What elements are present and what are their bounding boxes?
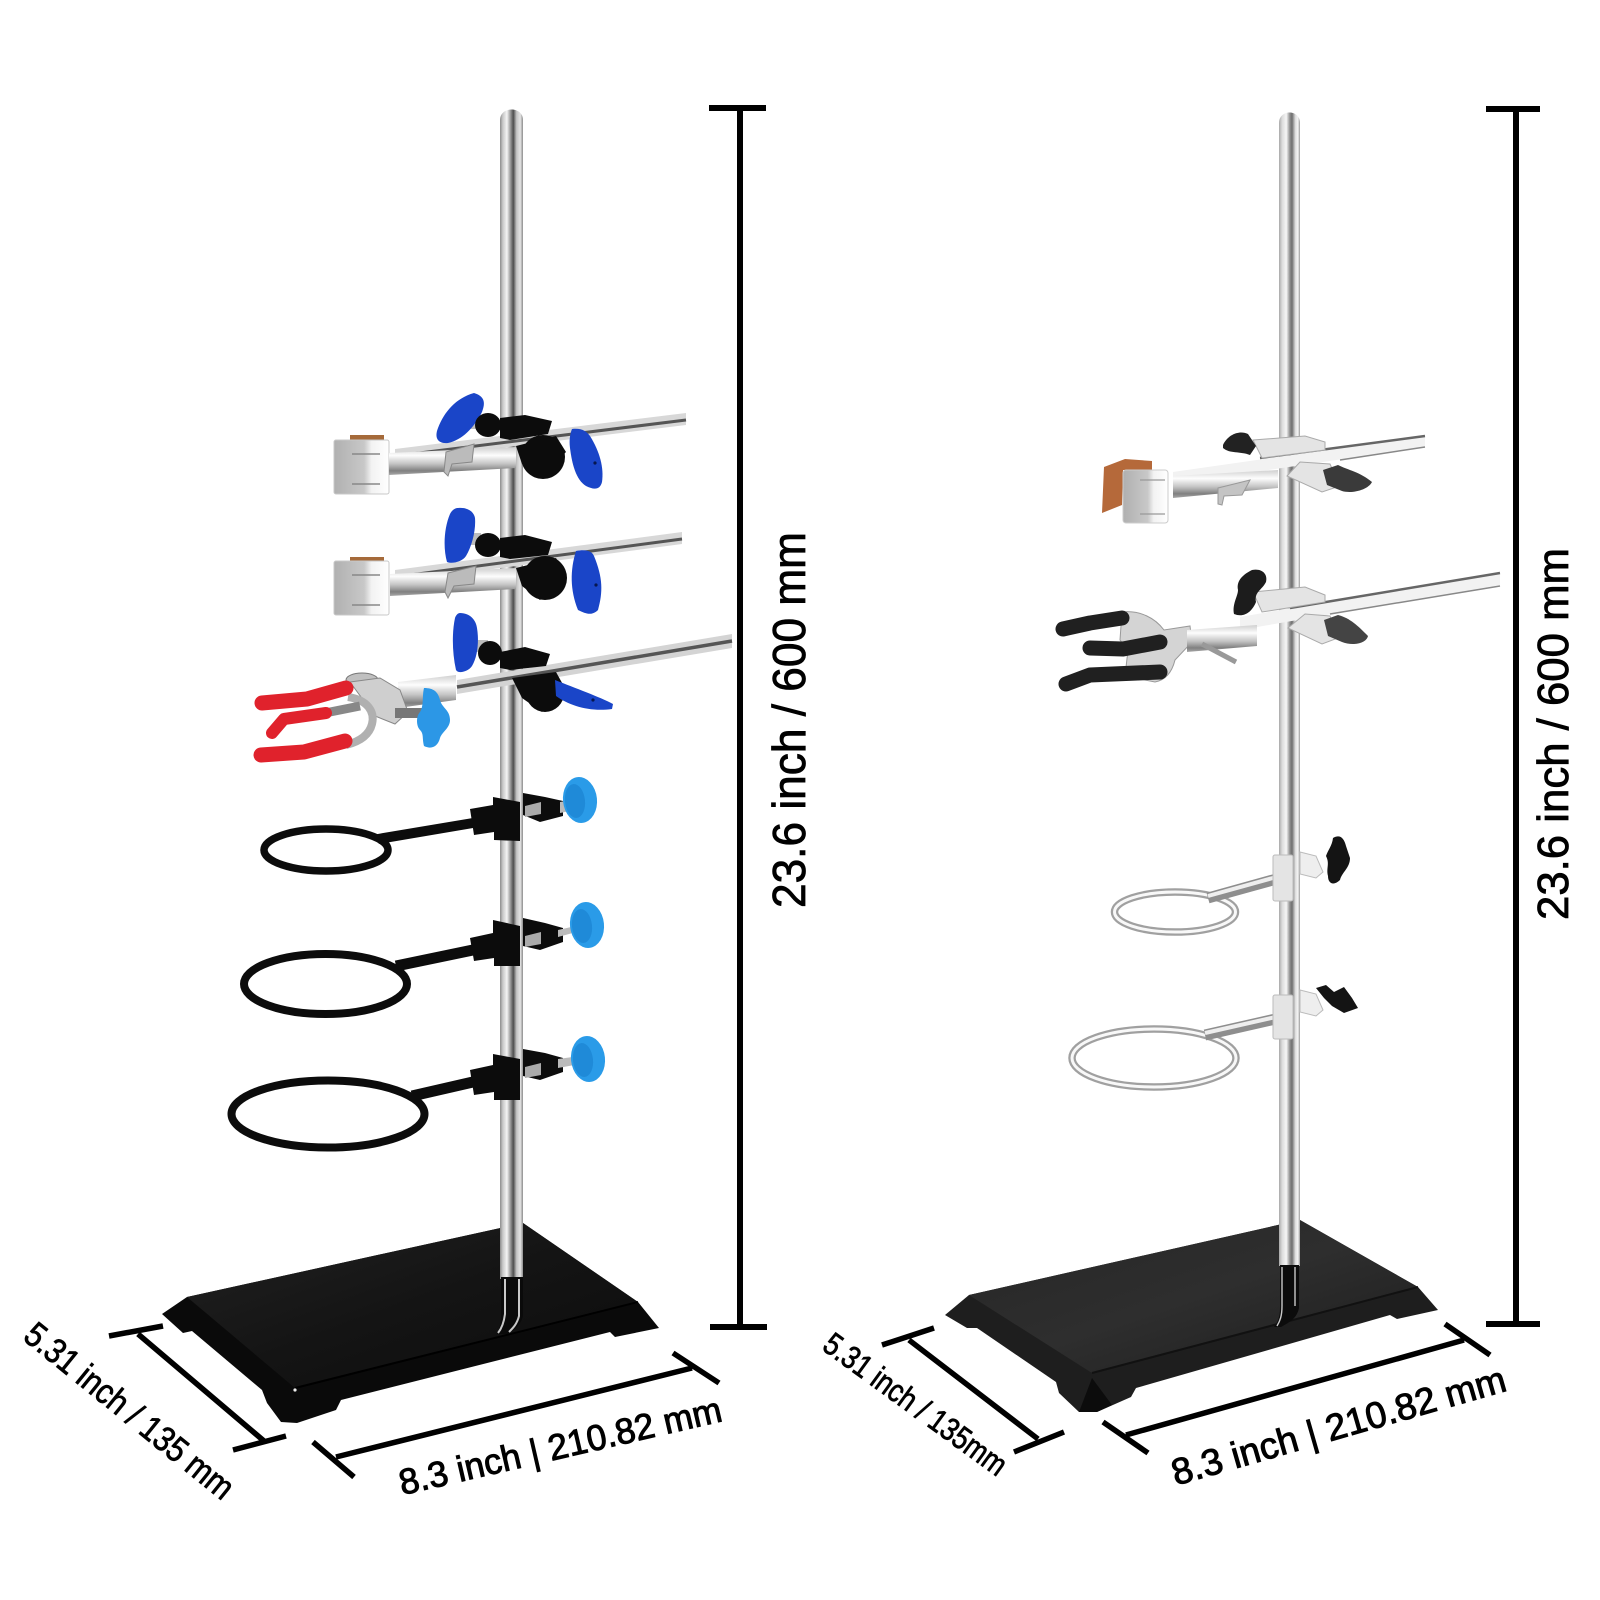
blue thumb wheel bbox=[569, 1034, 607, 1084]
clamp 1: left stand bbox=[334, 393, 686, 494]
lower bracket bbox=[1287, 462, 1340, 492]
clamp 2: left stand bbox=[334, 508, 682, 615]
upper black knob bbox=[1234, 570, 1266, 615]
clamp body bbox=[390, 568, 516, 596]
ring bbox=[264, 829, 388, 871]
wing nut bbox=[1218, 480, 1250, 505]
lower black knob bbox=[1323, 465, 1372, 492]
clamp 3: left stand with red jaws bbox=[261, 613, 732, 755]
ring support 1: left stand bbox=[264, 775, 599, 871]
lower bracket bbox=[1288, 614, 1338, 644]
long arm bbox=[395, 413, 686, 461]
silver ring bbox=[1072, 1029, 1236, 1087]
collar bbox=[1273, 995, 1293, 1039]
collar bbox=[470, 797, 520, 841]
long arm bbox=[395, 532, 682, 582]
ring support 1: right stand bbox=[1114, 836, 1350, 932]
top knob bbox=[453, 613, 550, 672]
arm bbox=[396, 950, 473, 966]
black knob bbox=[1316, 985, 1358, 1013]
blue thumb wheel bbox=[561, 775, 599, 825]
arm bbox=[1208, 876, 1280, 898]
black jaws bbox=[1063, 618, 1160, 684]
holder bbox=[334, 557, 389, 615]
screw bbox=[523, 1049, 580, 1080]
silver clamp body bbox=[398, 675, 456, 708]
rear bracket bbox=[1300, 852, 1323, 878]
right knob bbox=[516, 429, 602, 489]
clamp 1: right stand with cork pad bbox=[1102, 432, 1425, 523]
long arm bbox=[1240, 572, 1500, 630]
left width dimension bbox=[313, 1353, 726, 1503]
rear bracket bbox=[1300, 990, 1323, 1016]
jaw hub bbox=[325, 673, 425, 745]
arm bbox=[1205, 1016, 1280, 1035]
right knob bbox=[516, 550, 601, 614]
screw bbox=[523, 793, 570, 822]
arm bbox=[412, 1082, 473, 1096]
left lab stand bbox=[162, 110, 732, 1423]
right stand vertical rod bbox=[1274, 112, 1300, 1327]
height label: 23.6 inch / 600 mm bbox=[1529, 548, 1578, 920]
arm bbox=[378, 823, 473, 839]
ring bbox=[232, 1080, 424, 1148]
screw bbox=[523, 918, 580, 950]
red jaws bbox=[261, 688, 346, 755]
left height dimension bbox=[709, 108, 815, 1327]
cork pad bbox=[1102, 459, 1152, 513]
collar bbox=[1273, 855, 1293, 901]
right height dimension bbox=[1486, 109, 1578, 1324]
collar bbox=[470, 1054, 520, 1100]
width label: 8.3 inch | 210.82 mm bbox=[395, 1389, 726, 1503]
light blue wing knob bbox=[417, 688, 450, 748]
upper bracket bbox=[1253, 436, 1325, 458]
ring bbox=[244, 954, 407, 1014]
right depth dimension bbox=[817, 1325, 1064, 1483]
lower black knob bbox=[1324, 615, 1368, 644]
blue thumb wheel bbox=[568, 900, 606, 950]
long arm bbox=[1173, 436, 1425, 484]
depth label: 5.31 inch / 135 mm bbox=[17, 1315, 242, 1507]
clamp body bbox=[1173, 470, 1278, 498]
right stand base bbox=[945, 1220, 1438, 1412]
wing nut bbox=[445, 566, 476, 598]
wing nut bbox=[444, 444, 474, 476]
long arm bbox=[457, 634, 732, 694]
ring support 3: left stand bbox=[232, 1034, 607, 1148]
black knob bbox=[1326, 836, 1350, 883]
right knob bbox=[512, 672, 613, 712]
left depth dimension bbox=[17, 1315, 286, 1507]
collar bbox=[470, 920, 520, 966]
upper black knob bbox=[1223, 432, 1256, 455]
holder bbox=[334, 435, 389, 494]
clamp body bbox=[389, 447, 516, 475]
holder bbox=[1123, 470, 1168, 523]
width label: 8.3 inch | 210.82 mm bbox=[1167, 1359, 1511, 1493]
upper bracket bbox=[1253, 587, 1325, 612]
height label: 23.6 inch / 600 mm bbox=[763, 532, 815, 908]
clamp body bbox=[1187, 625, 1257, 652]
silver ring bbox=[1114, 892, 1236, 932]
top knob bbox=[445, 508, 552, 563]
left stand base bbox=[162, 1223, 659, 1423]
silver jaw frame bbox=[1120, 612, 1192, 682]
ring support 2: right stand bbox=[1072, 985, 1358, 1087]
top knob bbox=[436, 393, 552, 443]
right lab stand bbox=[945, 112, 1500, 1412]
clamp 2: right stand with black jaws bbox=[1063, 570, 1500, 684]
ring support 2: left stand bbox=[244, 900, 606, 1014]
right width dimension bbox=[1103, 1324, 1511, 1493]
depth label: 5.31 inch / 135mm bbox=[817, 1325, 1014, 1483]
left stand vertical rod bbox=[497, 110, 523, 1334]
threaded screw bbox=[1202, 644, 1236, 662]
